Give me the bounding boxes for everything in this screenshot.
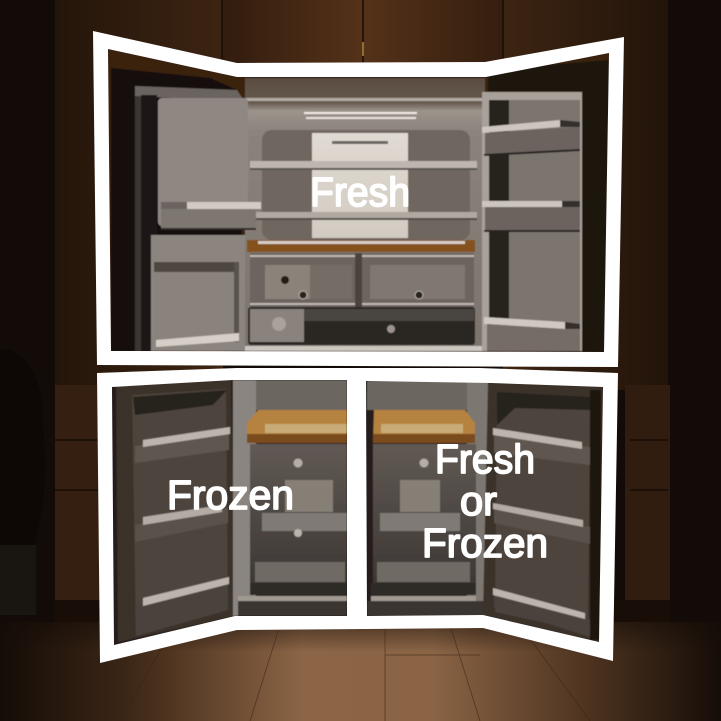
upper left door — [111, 68, 261, 351]
door shelves — [493, 428, 590, 637]
lower right door — [483, 383, 603, 642]
label: Fresh or Frozen — [422, 436, 548, 566]
door shelves — [135, 427, 230, 636]
label: Frozen: Frozen — [167, 472, 294, 518]
label: Fresh or Frozen: Frozen — [422, 520, 548, 566]
white outline: upper zone — [93, 31, 624, 367]
wooden shelf upper — [247, 240, 475, 252]
label: Fresh or Frozen: Fresh — [435, 436, 535, 482]
white outline: lower zones — [97, 368, 618, 663]
panel: frozen compartment (lower left) — [112, 380, 347, 645]
freezer drawer right — [367, 444, 487, 616]
panel: fresh compartment (upper fridge) — [108, 49, 609, 352]
label: Fresh: Fresh — [310, 169, 410, 215]
panel: fresh or frozen compartment (lower right) — [366, 381, 603, 642]
fridge interior upper — [245, 78, 485, 351]
upper right door — [482, 60, 609, 352]
crisper drawers — [245, 253, 485, 351]
wooden tray left — [247, 410, 347, 443]
wooden tray right — [373, 410, 475, 443]
lower left door — [116, 380, 235, 642]
freezer drawer left — [238, 444, 347, 616]
label: Fresh or Frozen: or — [460, 478, 497, 524]
